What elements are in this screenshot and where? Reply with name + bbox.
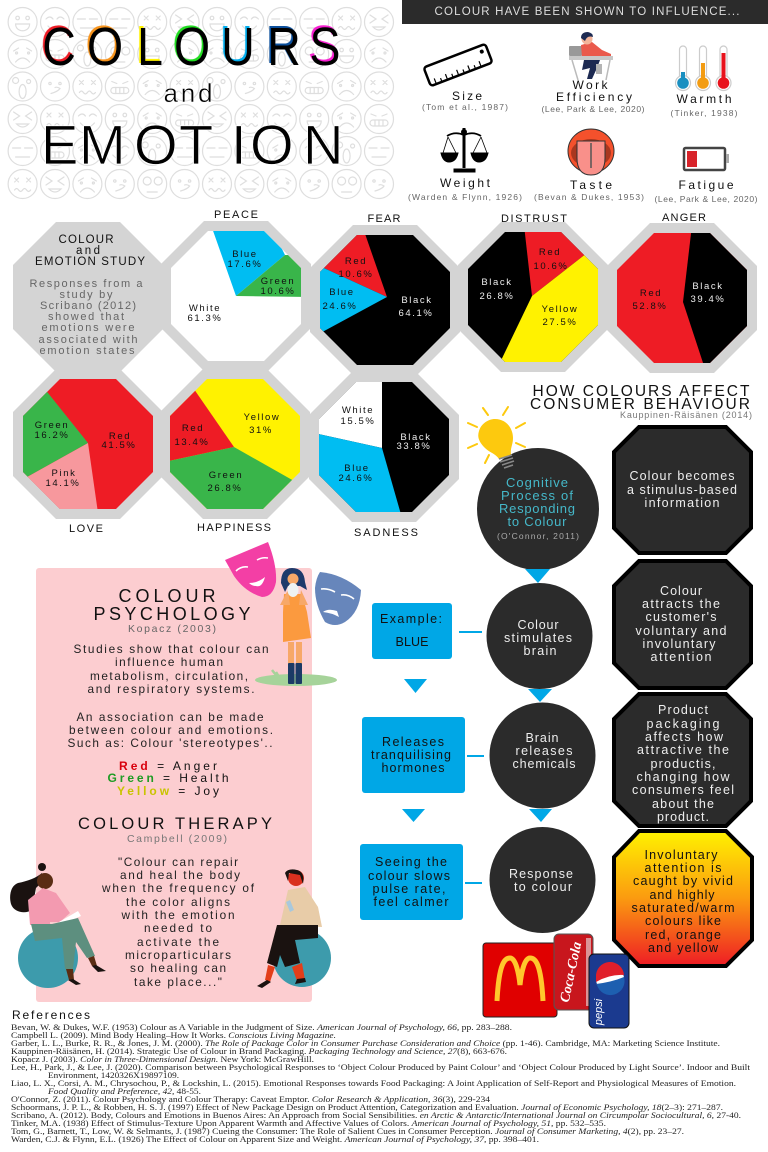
pie chart: anger — [607, 212, 760, 375]
circle: cognitive process: Cognitive — [506, 475, 568, 490]
weight label: Weight — [440, 176, 491, 190]
text: therapy quote: when the frequency of — [101, 881, 255, 895]
icon: bulb base — [499, 455, 514, 468]
title word: COLOURS: S — [310, 16, 340, 77]
pie chart: fear: 10.6% — [339, 269, 373, 280]
size label: (Tom et al., 1987) — [422, 102, 508, 112]
box: releases tranquilising hormones: Releases — [382, 735, 444, 749]
octagon: product packaging: productis, — [650, 757, 716, 771]
pie chart: sadness — [300, 370, 459, 539]
pie chart: anger: 39.4% — [691, 294, 725, 305]
fatigue label — [654, 178, 758, 204]
pie chart: peace: 61.3% — [188, 313, 222, 324]
pie chart: love — [13, 370, 162, 532]
text: therapy quote: so healing can — [130, 961, 226, 975]
pie chart: peace: Green — [261, 276, 295, 287]
icon: red soda can — [554, 934, 593, 1010]
circle: brain releases chemicals: chemicals — [512, 757, 576, 771]
heading: how colours affect consumer behaviour: CONSUMER BEHAVIOUR — [530, 396, 750, 413]
label: love: LOVE — [69, 523, 103, 535]
text: association — [68, 710, 273, 750]
box: example blue — [372, 603, 452, 659]
circle: cognitive process: Process of — [501, 488, 573, 503]
octagon: attracts attention: involuntary — [642, 637, 716, 651]
reference list: Tom, G., Barnett, T., Low, W. & Selmants, J. (1987) Cueing the Consumer: The Role of Salient Cues in Consumer Perception. Journal of Consumer Marketing, 4 (2), pp. 23–27. — [11, 1126, 684, 1136]
pie chart: distrust: 10.6% — [534, 261, 568, 272]
pie chart: love: 41.5% — [102, 440, 136, 451]
illustration: woman on ball, right — [257, 869, 331, 988]
box: releases tranquilising hormones: hormones — [382, 761, 444, 775]
box: releases tranquilising hormones — [362, 717, 465, 793]
taste label: Taste — [570, 178, 612, 192]
octagon: involuntary attention: attention is — [644, 861, 722, 875]
work efficiency label: (Lee, Park & Lee, 2020) — [542, 104, 645, 114]
circle: brain releases chemicals: Brain — [526, 731, 559, 745]
reference list: O'Connor, Z. (2011). Colour Psychology and Colour Therapy: Caveat Emptor. Color Research & Application, 36 (3), 229-234 — [11, 1094, 491, 1104]
reference list: Tinker, M.A. (1938) Effect of Stimulus-Texture Upon Apparent Warmth and Affective Values of Colors. American Journal of Psychology, 51, pp. 532–535. — [11, 1118, 606, 1128]
octagon: attracts attention: voluntary and — [636, 624, 727, 638]
taste label — [534, 178, 644, 202]
pie chart: peace: 10.6% — [261, 286, 295, 297]
octagon: attracts attention: attention — [650, 650, 712, 664]
reference list: Warden, C.J. & Flynn, E.L. (1926) The Effect of Colour on Apparent Size and Weight. American Journal of Psychology, 37, pp. 398–401. — [11, 1134, 539, 1144]
arrow — [404, 679, 427, 693]
panel: colour influences — [402, 0, 768, 204]
banner heading: COLOUR HAVE BEEN SHOWN TO INFLUENCE... — [434, 6, 740, 18]
circle: cognitive process — [477, 448, 599, 570]
study heading: and — [76, 245, 100, 257]
work efficiency label: Work — [572, 78, 608, 92]
heading: how colours affect consumer behaviour: Kauppinen-Räisänen (2014) — [620, 410, 752, 420]
label: anger: ANGER — [662, 212, 706, 224]
heading: colour psychology: COLOUR — [118, 586, 216, 606]
icon: light bulb — [468, 407, 525, 463]
flow: cognitive process circles — [468, 407, 599, 933]
text: studies show: and respiratory systems. — [88, 682, 254, 696]
pie chart: happiness: Yellow — [244, 412, 280, 423]
octagon: product packaging: packaging — [646, 717, 720, 731]
illustration: pink happy mask — [225, 542, 276, 597]
reference list: Campbell L. (2009). Mind Body Healing–How It Works. Conscious Living Magazine. — [11, 1030, 336, 1040]
text: therapy quote: and heal the body — [120, 868, 240, 882]
study heading: EMOTION STUDY — [35, 256, 145, 268]
octagon: involuntary attention: and highly — [650, 888, 715, 902]
reference list: Schoormans, J. P. L., & Robben, H. S. J. (1997) Effect of New Package Design on Product Attention, Categorization and Evaluation. Journal of Economic Psychology, 18 (2–3): 271–287. — [11, 1102, 723, 1112]
circle: cognitive process: (O'Connor, 2011) — [497, 531, 579, 541]
fatigue label: (Lee, Park & Lee, 2020) — [654, 194, 758, 204]
study octagon — [13, 222, 163, 372]
octagon: product packaging: affects how — [645, 730, 724, 744]
taste label: (Bevan & Dukes, 1953) — [534, 192, 644, 202]
illustration: woman holding mask — [255, 568, 337, 686]
text: studies show: metabolism, circulation, — [90, 669, 248, 683]
work efficiency label: Efficiency — [556, 90, 632, 104]
box: seeing the colour slows pulse rate: Seeing the — [375, 855, 447, 869]
pie chart: fear: Blue — [329, 287, 355, 298]
box: seeing the colour slows pulse rate — [360, 844, 463, 920]
pie chart: sadness: White — [342, 405, 374, 416]
text: association: Such as: Colour 'stereotypes'.. — [68, 736, 272, 750]
octagon: stimulus-based information — [614, 427, 751, 553]
icon: ruler — [424, 44, 492, 86]
study body text: emotions were — [42, 322, 134, 334]
pie chart: sadness: 15.5% — [341, 416, 375, 427]
box: seeing the colour slows pulse rate: pulse rate, — [372, 882, 446, 896]
circle: colour stimulates brain: stimulates — [504, 631, 572, 645]
pie chart: fear: Black — [401, 295, 433, 306]
label: happiness: HAPPINESS — [197, 522, 271, 534]
title word: COLOURS: U — [221, 16, 255, 77]
banner heading — [402, 0, 768, 24]
text: studies show: Studies show that colour can — [74, 642, 268, 656]
label: sadness: SADNESS — [354, 527, 418, 539]
title word: EMOTION: EMOTION — [41, 113, 343, 176]
octagon: product packaging: about the — [652, 797, 714, 811]
text: studies show: influence human — [115, 655, 223, 669]
warmth label — [670, 92, 738, 118]
circle: colour stimulates brain — [486, 583, 592, 689]
study body text: Responses from a — [30, 278, 143, 290]
colour stereotypes list: Red = Anger — [119, 759, 217, 773]
pie chart: love: 16.2% — [35, 430, 69, 441]
pie chart: sadness: Blue — [344, 463, 370, 474]
pie chart: sadness: Black — [400, 432, 432, 443]
illustration: woman on ball, left — [10, 863, 106, 988]
illustration: blue sad mask — [315, 572, 361, 625]
circle: cognitive process: Responding — [499, 501, 575, 516]
pie chart: happiness — [162, 370, 310, 531]
box: releases tranquilising hormones: tranquilising — [371, 748, 451, 762]
heading: colour therapy: Campbell (2009) — [127, 833, 227, 845]
weight label — [408, 176, 522, 202]
pie chart: love: 14.1% — [46, 478, 80, 489]
study body text: study by — [60, 289, 113, 301]
arrow — [529, 809, 552, 822]
pie chart: distrust: Red — [539, 247, 561, 258]
circle: colour stimulates brain: Colour — [518, 618, 558, 632]
text: therapy quote: activate the — [137, 935, 219, 949]
pie chart: anger: 52.8% — [633, 301, 667, 312]
octagon: product packaging: product. — [657, 810, 709, 824]
octagon: stimulus-based information: a stimulus-based — [627, 483, 737, 497]
study body text: Scribano (2012) — [40, 300, 136, 312]
heading: how colours affect consumer behaviour — [530, 383, 752, 420]
pie chart: peace: 17.6% — [228, 259, 262, 270]
octagon: product packaging: attractive the — [637, 743, 729, 757]
colour stereotypes list: Yellow = Joy — [117, 784, 219, 798]
octagon: involuntary attention: caught by vivid — [633, 874, 733, 888]
title word: COLOURS: L — [137, 16, 163, 77]
pink panel background — [36, 568, 312, 1002]
flow: blue example boxes — [360, 603, 484, 920]
octagon: product packaging — [614, 694, 751, 826]
label: peace: PEACE — [214, 209, 258, 221]
reference list: Lee, H., Park, J., & Lee, J. (2020). Comparison between Psychological Responses to ‘Object Colour Produced by Paint Colour’ and ‘Object Colour Produced by Light Source’. Indoor and Built — [11, 1062, 751, 1072]
text: association: between colour and emotions. — [69, 723, 273, 737]
study body text: associated with — [38, 334, 138, 346]
icon: red soda can: Coca-Cola — [558, 941, 585, 1004]
heading: colour psychology: PSYCHOLOGY — [94, 604, 250, 624]
heading: colour therapy: COLOUR THERAPY — [78, 815, 272, 833]
octagon: stimulus-based information: Colour becomes — [630, 469, 734, 483]
colour stereotypes list — [108, 759, 228, 798]
label: fear: FEAR — [368, 213, 401, 225]
reference list: Food Quality and Preference, 42, 48-55. — [47, 1086, 201, 1096]
heading: colour psychology — [94, 586, 250, 635]
octagon: stimulus-based information: information — [644, 496, 720, 510]
octagon: involuntary attention: and yellow — [648, 941, 719, 955]
circle: cognitive process: to Colour — [508, 514, 567, 529]
arrow — [528, 689, 552, 702]
study heading — [35, 234, 145, 268]
pie chart: fear: 64.1% — [399, 308, 433, 319]
title word: COLOURS — [42, 16, 340, 77]
octagon: involuntary attention: saturated/warm — [632, 901, 734, 915]
pie chart: fear — [300, 213, 460, 375]
title word: COLOURS: R — [267, 16, 301, 77]
pie chart: love: Pink — [52, 468, 76, 479]
reference list: Garber, L. L., Burke, R. R., & Jones, J. M. (2000). The Role of Package Color in Consumer Purchase Consideration and Choice (pp. 1-46). Cambridge, MA: Marketing Science Institute. — [11, 1038, 720, 1048]
reference list: Environment, 1420326X19897109. — [48, 1070, 179, 1080]
pie chart: sadness: 24.6% — [339, 473, 373, 484]
pie chart: happiness: Green — [209, 470, 243, 481]
references heading: References — [12, 1008, 90, 1022]
box: seeing the colour slows pulse rate: colour slows — [368, 869, 450, 883]
octagon: involuntary attention: colours like — [645, 914, 721, 928]
octagon: attracts attention — [614, 561, 751, 688]
text: therapy quote: needed to — [144, 921, 212, 935]
study body text: showed that — [48, 311, 124, 323]
pie chart: distrust — [458, 213, 610, 375]
pie chart: happiness: 26.8% — [208, 483, 242, 494]
study heading: COLOUR — [58, 234, 114, 246]
reference list: Kauppinen-Räisänen, H. (2014). Strategic Use of Colour in Brand Packaging. Packaging Technology and Science, 27 (8), 663-676. — [11, 1046, 507, 1056]
fatigue label: Fatigue — [678, 178, 734, 192]
size label: Size — [452, 89, 482, 103]
octagon: attracts attention: attracts the — [642, 597, 720, 611]
title word: COLOURS: C — [42, 16, 76, 77]
pie chart: happiness: 13.4% — [175, 437, 209, 448]
warmth label: Warmth — [676, 92, 732, 106]
reference list: Kopacz J. (2003). Color in Three-Dimensional Design. New York: McGrawHill. — [11, 1054, 314, 1064]
pie chart: love: Red — [109, 431, 131, 442]
panel: colour and emotion study — [13, 222, 163, 372]
size label — [422, 89, 508, 112]
references — [11, 1008, 751, 1144]
pie chart: anger: Black — [692, 281, 724, 292]
label: distrust: DISTRUST — [501, 213, 567, 225]
pie chart: distrust: Yellow — [542, 304, 578, 315]
title — [41, 16, 343, 176]
text: association: An association can be made — [76, 710, 264, 724]
octagon: involuntary attention: red, orange — [645, 928, 721, 942]
reference list — [11, 1022, 751, 1144]
text: therapy quote: with the emotion — [120, 908, 234, 922]
text: therapy quote: take place..." — [134, 975, 222, 989]
box: example blue: Example: — [380, 612, 442, 626]
reference list: Scribano, A. (2012). Body, Colours and Emotions in Buenos Aires: An Approach from Social Sensibilities. en Arctic & Antarctic/International Journal on Circumpolar Sociocultural, 6, 27-40. — [11, 1110, 741, 1120]
icon: blue soda can: pepsi — [593, 998, 605, 1026]
arrow — [402, 809, 425, 822]
text: therapy quote — [101, 855, 255, 989]
study body text — [30, 278, 143, 357]
arrow — [525, 569, 550, 583]
heading: colour therapy — [78, 815, 272, 845]
circle: colour stimulates brain: brain — [524, 644, 557, 658]
connector — [465, 882, 482, 884]
pie chart: peace — [161, 209, 311, 371]
text: therapy quote: "Colour can repair — [118, 855, 238, 869]
heading: how colours affect consumer behaviour: HOW COLOURS AFFECT — [532, 383, 750, 400]
heading: colour psychology: Kopacz (2003) — [128, 623, 216, 635]
circle: response to colour — [490, 827, 596, 933]
column: consumer behaviour octagons — [614, 427, 752, 966]
pie chart: fear: Red — [345, 256, 367, 267]
connector — [459, 631, 482, 633]
box: seeing the colour slows pulse rate: feel calmer — [374, 895, 448, 909]
pie chart: distrust: 27.5% — [543, 317, 577, 328]
pie chart: happiness: Red — [182, 423, 204, 434]
title word: and: and — [164, 78, 212, 108]
box: example blue: BLUE — [396, 635, 428, 649]
pie chart: love: Green — [35, 420, 69, 431]
text: therapy quote: the color aligns — [126, 895, 230, 909]
icon: fast food logo — [483, 943, 557, 1017]
title word: COLOURS: O — [87, 16, 123, 77]
title word: COLOURS: O — [174, 16, 210, 77]
brand logos — [483, 934, 629, 1028]
octagon: attracts attention: customer's — [646, 610, 716, 624]
pie chart: happiness: 31% — [249, 425, 273, 436]
text: studies show — [74, 642, 268, 696]
pie chart: fear: 24.6% — [323, 301, 357, 312]
octagon: involuntary attention: Involuntary — [644, 848, 718, 862]
pie chart: peace: Blue — [232, 249, 258, 260]
octagon: product packaging: Product — [658, 703, 709, 717]
panel: colour psychology and therapy — [10, 542, 361, 1002]
icon: thermometers — [676, 46, 731, 90]
pie chart: distrust: Black — [481, 277, 513, 288]
emoji background pattern — [8, 8, 393, 198]
weight label: (Warden & Flynn, 1926) — [408, 192, 522, 202]
colour stereotypes list: Green = Health — [108, 771, 228, 785]
icon: low battery — [684, 148, 729, 170]
octagon: product packaging: changing how — [636, 770, 730, 784]
work efficiency label — [542, 78, 645, 114]
study body text: emotion states — [40, 345, 135, 357]
circle: response to colour: to colour — [514, 880, 572, 894]
octagon: attracts attention: Colour — [660, 584, 702, 598]
icon: balance scales — [441, 128, 488, 172]
pie chart: peace: White — [189, 303, 221, 314]
connector — [467, 755, 484, 757]
icon: person at desk — [569, 32, 613, 80]
pie chart: distrust: 26.8% — [480, 291, 514, 302]
octagon: product packaging: consumers feel — [632, 783, 734, 797]
pie chart: sadness: 33.8% — [397, 441, 431, 452]
reference list: Bevan, W. & Dukes, W.F. (1953) Colour as A Variable in the Judgment of Size. American Journal of Psychology, 66, pp. 283–288. — [11, 1022, 512, 1032]
reference list: Liao, L. X., Corsi, A. M., Chrysochou, P., & Lockshin, L. (2015). Emotional Responses towards Food Packaging: A Joint Application of Self-Report and Physiological Measures of Emotion. — [11, 1078, 736, 1088]
text: therapy quote: microparticulars — [125, 948, 231, 962]
circle: brain releases chemicals: releases — [516, 744, 572, 758]
icon: blue soda can — [589, 954, 629, 1028]
circle: brain releases chemicals — [490, 702, 596, 808]
warmth label: (Tinker, 1938) — [670, 108, 738, 118]
pie chart: anger: Red — [640, 288, 662, 299]
circle: response to colour: Response — [509, 867, 573, 881]
icon: tongue — [568, 129, 614, 175]
octagon: involuntary attention — [614, 831, 752, 966]
